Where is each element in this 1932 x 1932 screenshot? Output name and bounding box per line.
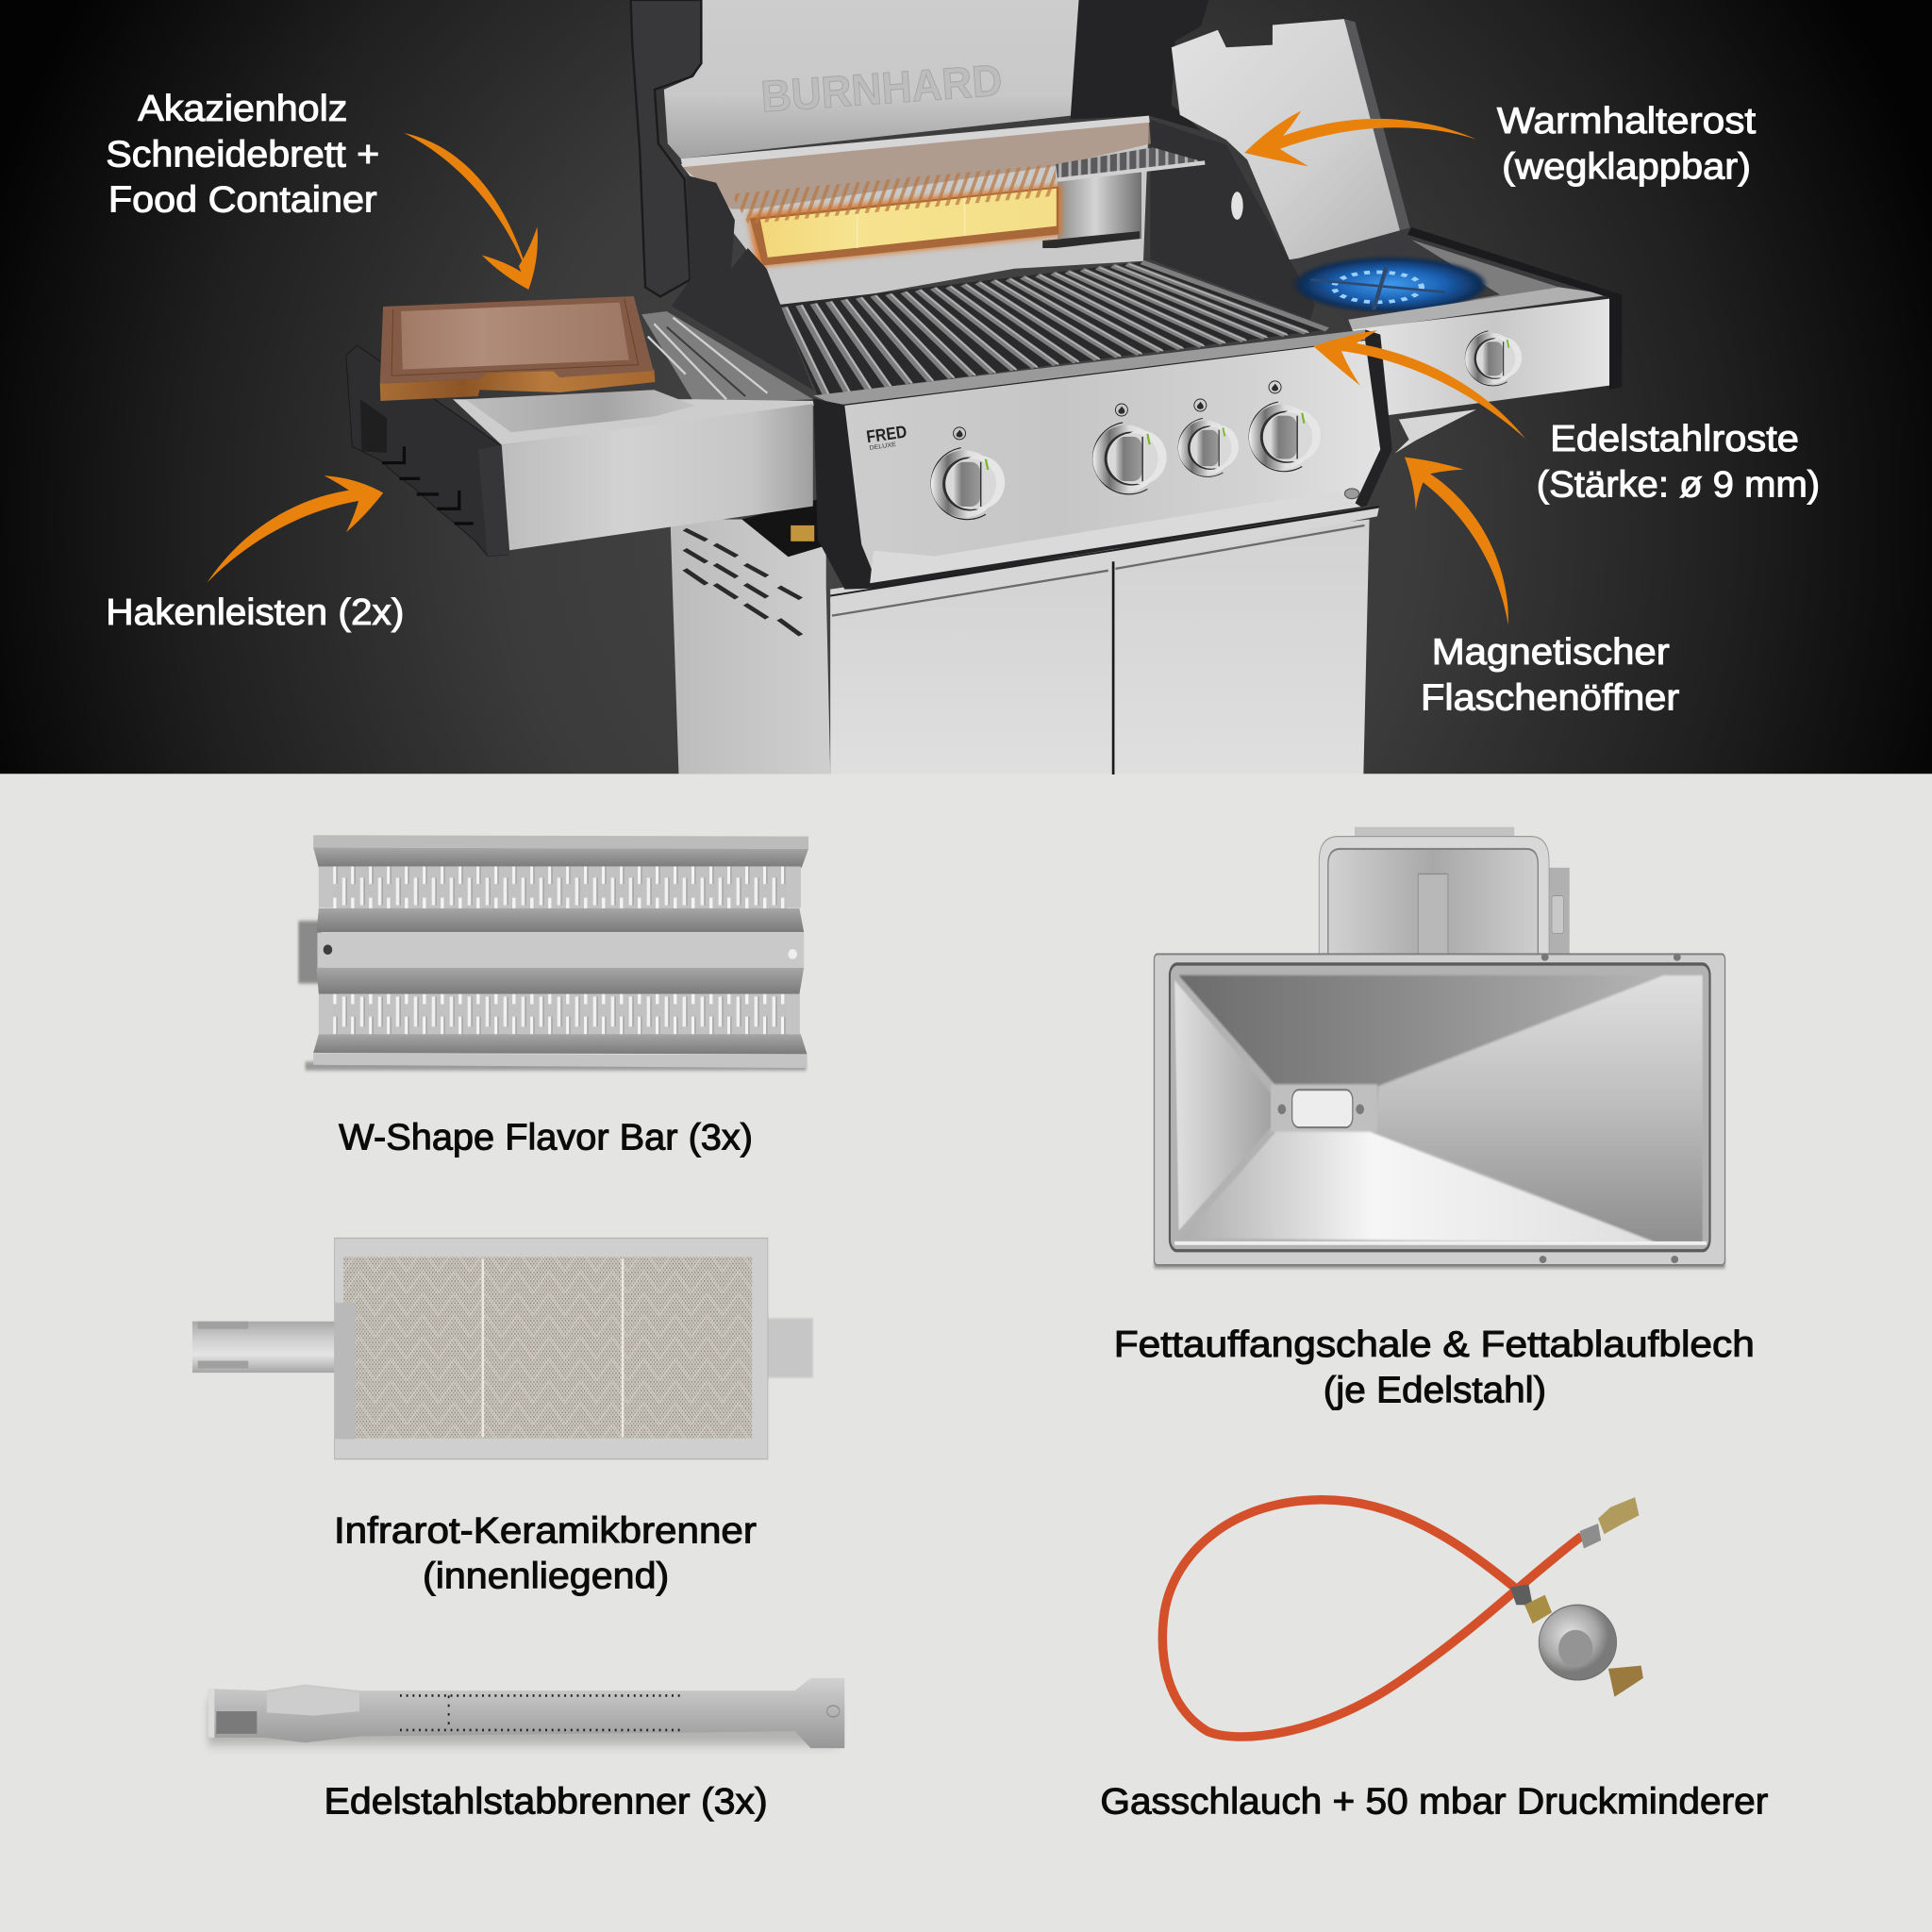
shelf front end cap [478, 445, 509, 556]
callout: cutting board and food container: Schneidebrett + [106, 134, 379, 175]
infrared burner glow halo [748, 185, 1061, 267]
control panel [813, 329, 1392, 590]
arrow: bottle opener [1405, 458, 1508, 625]
label: infrared burner: Infrarot-Keramikbrenner [334, 1510, 757, 1551]
lid and firebox [631, 0, 1208, 309]
rack orange wires over burner [731, 164, 1056, 224]
panel rivet [1344, 489, 1359, 499]
arrow: warming rack [1244, 111, 1476, 166]
callout: cutting board and food container: Food Container [108, 180, 377, 221]
dark line below the panel [830, 507, 1379, 596]
lid inner stainless surface [664, 0, 1079, 158]
right lid frame and hinge [1071, 0, 1208, 130]
left cabinet door [830, 549, 1110, 774]
label: gas hose: Gasschlauch + 50 mbar Druckminderer [1100, 1782, 1768, 1823]
right shelf top rim [1348, 287, 1611, 330]
callout: warming rack [1497, 101, 1756, 187]
grill cart side panel [671, 520, 830, 774]
right shelf knob [1465, 331, 1522, 386]
product: W-shape flavor bar [298, 835, 808, 1071]
food container tray [465, 390, 695, 432]
shelf top surface [453, 399, 814, 445]
rack back wire wall [683, 122, 1151, 208]
rack right grid [1056, 147, 1205, 179]
gas connector [741, 499, 822, 557]
tray body [1154, 954, 1725, 1268]
callout: warming rack: (wegklappbar) [1502, 146, 1751, 187]
control knob 4 [1249, 402, 1321, 472]
door gap [1110, 561, 1117, 774]
flame icon 3 [1194, 399, 1207, 411]
inner right wall [1150, 120, 1315, 320]
callout: cutting board and food container [106, 89, 379, 221]
grease container behind tray [1319, 827, 1570, 956]
side burner well [1293, 227, 1622, 329]
left shelf bracket with hook rails [346, 345, 508, 556]
callout: bottle opener [1421, 632, 1679, 718]
cart body [671, 499, 1370, 774]
side burner interior [1353, 240, 1558, 320]
right shelf dark end cap [1407, 227, 1622, 390]
grate front lip [813, 329, 1365, 406]
flame icon 4 [1269, 381, 1281, 393]
control panel model badge: DELUXE [869, 441, 897, 452]
acacia cutting board [380, 296, 655, 401]
flame icon 1 [954, 427, 966, 440]
right shelf front face [1353, 299, 1609, 415]
label: grease tray [1114, 1324, 1755, 1410]
arrow: hook rails [207, 475, 383, 583]
control knob 3 [1178, 418, 1239, 476]
control panel bezel [813, 329, 1392, 590]
control panel model badge: FRED [865, 421, 908, 446]
product: stainless rod burner [208, 1678, 844, 1748]
side burner lid [1172, 19, 1413, 259]
control panel face [844, 341, 1380, 582]
rack front bar [1058, 162, 1205, 180]
control knob 1 [931, 448, 1005, 520]
label: flavor bar: W-Shape Flavor Bar (3x) [339, 1118, 753, 1158]
callout: bottle opener: Flaschenöffner [1421, 677, 1679, 718]
left shelf with board [346, 296, 814, 556]
dark hero panel background [0, 0, 1932, 774]
magnetic bottle opener [1394, 409, 1476, 454]
arrow: cutting board [404, 133, 538, 290]
product: gas hose with pressure regulator [1162, 1497, 1643, 1737]
ceramic tile seams [858, 198, 965, 248]
lid embossed brand text: BURNHARD [759, 55, 1004, 122]
orange gas hose [1162, 1500, 1582, 1737]
stainless grates [780, 262, 1327, 395]
control knob 2 [1092, 423, 1167, 494]
cabinet rail [830, 508, 1379, 616]
flame icon 2 [1115, 404, 1127, 416]
firebox walls and grates [780, 120, 1327, 395]
rail underside [832, 525, 1364, 616]
rack top bar [681, 116, 1150, 167]
label: rod burner: Edelstahlstabbrenner (3x) [325, 1782, 768, 1823]
warming rack [672, 116, 1205, 390]
infrared burner housing [750, 187, 1058, 266]
blue side burner flame [1296, 258, 1485, 311]
callout: stainless grates [1537, 419, 1820, 505]
panel details, knobs and cabinet rail [830, 381, 1379, 774]
callout: warming rack: Warmhalterost [1497, 101, 1756, 142]
callout: stainless grates: Edelstahlroste [1550, 419, 1799, 459]
callout: hook rails: Hakenleisten (2x) [106, 592, 404, 633]
product: infrared ceramic burner [192, 1239, 813, 1459]
right side burner and shelf [1172, 19, 1622, 454]
hero grill illustration [346, 0, 1622, 774]
inner left wall [672, 175, 813, 390]
label: grease tray: (je Edelstahl) [1324, 1370, 1546, 1410]
right cabinet door [1110, 520, 1370, 774]
arrow: stainless grates [1313, 330, 1525, 439]
product: grease tray and drip pan [1154, 827, 1725, 1268]
callout: cutting board and food container: Akazienholz [138, 89, 347, 129]
infrared burner glowing surface [760, 189, 1057, 258]
hose clamps and brass fittings [1510, 1497, 1643, 1697]
right metal block [1058, 172, 1141, 239]
firebox back wall [681, 120, 1149, 309]
callout: stainless grates: (Stärke: ø 9 mm) [1537, 464, 1820, 505]
callout: bottle opener: Magnetischer [1432, 632, 1670, 673]
control panel lower facet [870, 491, 1361, 583]
pressure regulator body [1539, 1605, 1617, 1680]
left lid frame [631, 0, 701, 296]
bracket below the metal block [1042, 231, 1140, 248]
label: grease tray: Fettauffangschale & Fettablaufblech [1114, 1324, 1755, 1365]
label: infrared burner: (innenliegend) [423, 1557, 669, 1597]
rack right grid wires [1056, 147, 1205, 179]
rear shelf slats [641, 311, 813, 404]
left shelf front face [502, 404, 813, 550]
label: infrared burner [334, 1510, 757, 1597]
